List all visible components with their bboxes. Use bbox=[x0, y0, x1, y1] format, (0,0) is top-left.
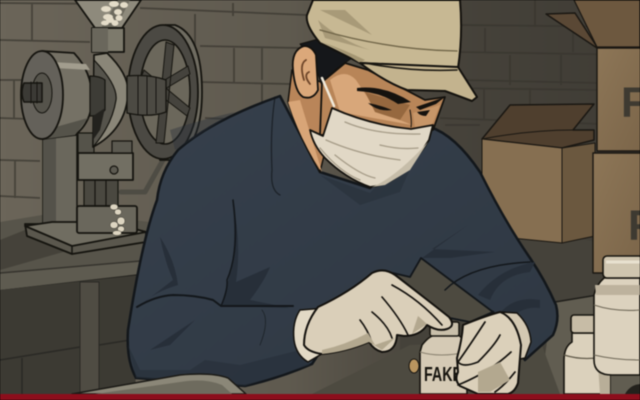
worker neck and head bbox=[288, 0, 477, 187]
sleeve lines bbox=[137, 97, 530, 345]
right glove bbox=[456, 312, 531, 394]
red footer bar bbox=[0, 394, 640, 400]
open cardboard box bbox=[482, 104, 595, 243]
bottle with FAKE label bbox=[420, 322, 467, 394]
left glove bbox=[294, 270, 452, 362]
metal tray bbox=[72, 374, 246, 394]
dark bottle corner bbox=[625, 384, 640, 394]
medium pill bottle bbox=[564, 315, 610, 394]
flywheel bbox=[127, 25, 202, 160]
large pill bottle bbox=[594, 256, 640, 375]
face mask bbox=[310, 78, 433, 187]
stacked boxes bbox=[546, 0, 640, 273]
worker sweater bbox=[128, 96, 557, 386]
left workbench bbox=[0, 212, 150, 394]
hopper with pills bbox=[75, 0, 141, 52]
hair bbox=[300, 38, 352, 95]
cap bbox=[307, 0, 477, 101]
bottle text: FAKE bbox=[424, 364, 462, 386]
neck bbox=[288, 70, 340, 172]
machine column and base bbox=[25, 133, 163, 254]
ear bbox=[293, 46, 318, 98]
pills falling bbox=[110, 204, 125, 236]
pill on table bbox=[409, 359, 419, 373]
pulley wheel bbox=[21, 51, 92, 139]
sweater folds bbox=[128, 112, 540, 386]
press housing bbox=[78, 53, 133, 180]
pill press machine bbox=[21, 0, 202, 254]
eyebrows and eyes bbox=[357, 88, 445, 116]
face bbox=[320, 63, 445, 135]
table gap between torso and right arm bbox=[393, 258, 493, 322]
right table surface bbox=[312, 220, 640, 394]
